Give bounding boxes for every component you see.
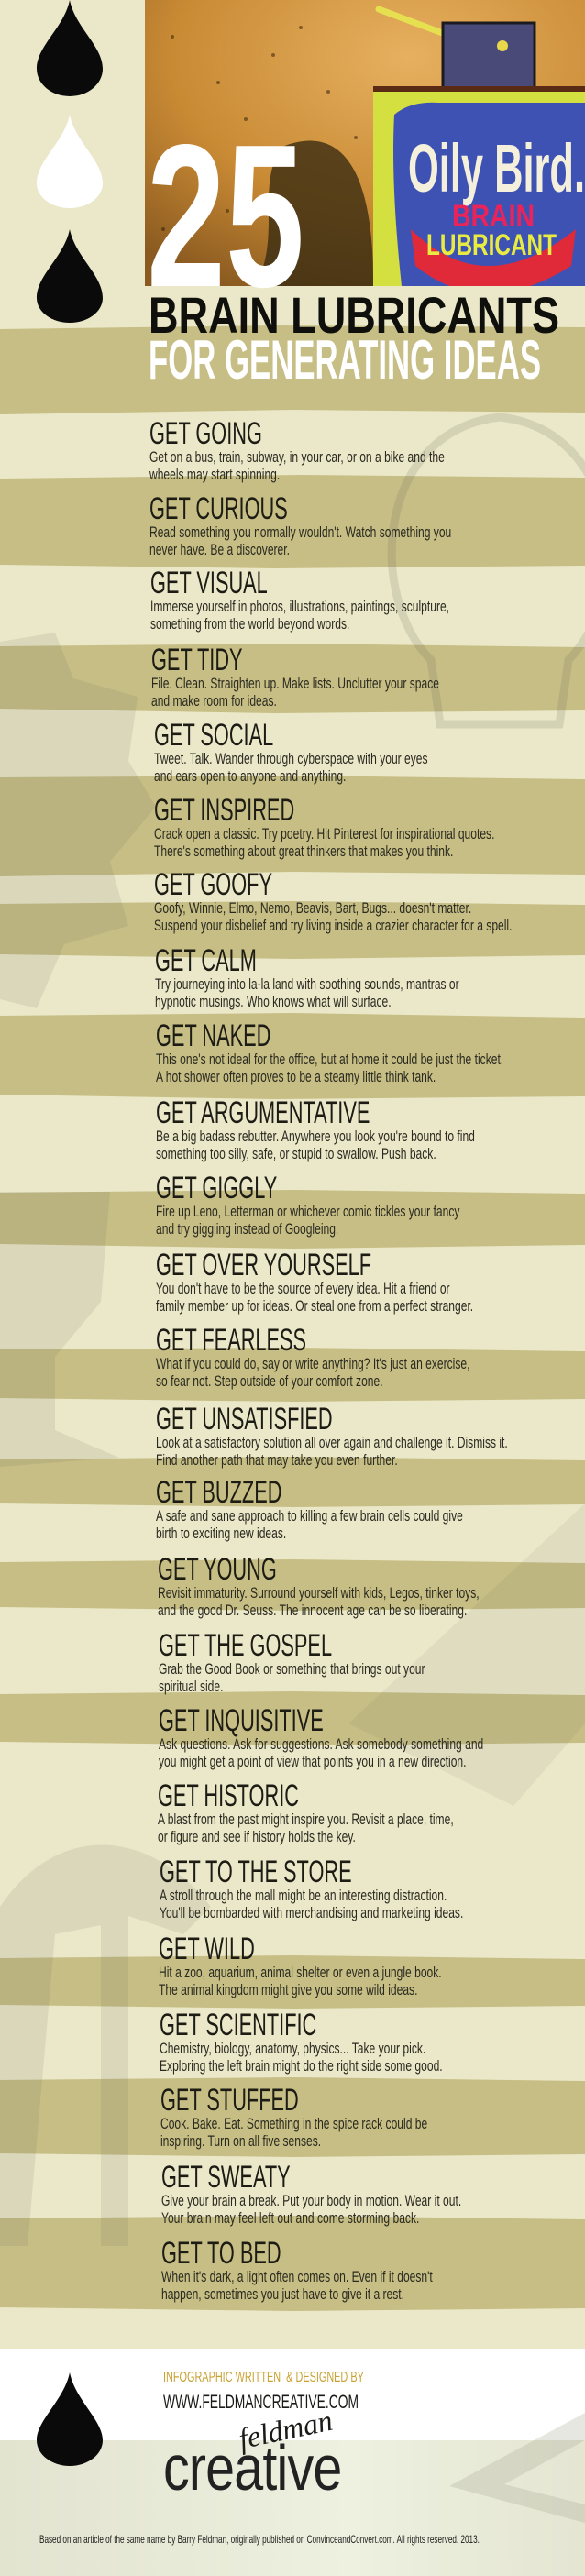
item 6: GET INSPIRED <box>154 793 294 828</box>
item 16: Revisit immaturity. Surround yourself with kids, Legos, tinker toys, <box>158 1584 480 1602</box>
item 6: Crack open a classic. Try poetry. Hit Pinterest for inspirational quotes. <box>154 825 494 842</box>
item 19 <box>158 1778 454 1845</box>
item 6: There's something about great thinkers that makes you think. <box>154 842 453 860</box>
item 10: something too silly, safe, or stupid to swallow. Push back. <box>156 1145 436 1162</box>
item 14 <box>156 1402 508 1469</box>
item 10: GET ARGUMENTATIVE <box>156 1095 370 1130</box>
item 16: GET YOUNG <box>158 1552 277 1587</box>
item 9: This one's not ideal for the office, but at home it could be just the ticket. <box>156 1051 503 1068</box>
item 17: GET THE GOSPEL <box>159 1628 332 1663</box>
title <box>147 128 559 391</box>
item 12: GET OVER YOURSELF <box>156 1248 371 1282</box>
item 10: Be a big badass rebutter. Anywhere you look you're bound to find <box>156 1128 475 1145</box>
item 3: Immerse yourself in photos, illustrations, paintings, sculpture, <box>150 598 449 615</box>
item 10 <box>156 1095 475 1162</box>
item 8 <box>155 943 459 1010</box>
item 25: When it's dark, a light often comes on. Even if it doesn't <box>161 2268 433 2285</box>
item 3: something from the world beyond words. <box>150 615 349 633</box>
item 9: GET NAKED <box>156 1018 270 1053</box>
item 24: Give your brain a break. Put your body in motion. Wear it out. <box>161 2192 461 2209</box>
item 8: hypnotic musings. Who knows what will surface. <box>155 993 392 1010</box>
icon: drops column <box>37 0 103 323</box>
decorative chevron <box>449 2413 585 2523</box>
item 4 <box>151 643 439 710</box>
item 9: A hot shower often proves to be a steamy little think tank. <box>156 1068 436 1085</box>
item 5 <box>154 718 428 785</box>
item 5: and ears open to anyone and anything. <box>154 767 346 785</box>
header photo: oil can: BRAIN <box>452 199 535 234</box>
item 2: never have. Be a discoverer. <box>149 541 290 558</box>
item 21: The animal kingdom might give you some wild ideas. <box>159 1981 417 1998</box>
item 7: Goofy, Winnie, Elmo, Nemo, Beavis, Bart, Bugs... doesn't matter. <box>154 899 471 917</box>
item 15: GET BUZZED <box>156 1475 281 1510</box>
item 12: family member up for ideas. Or steal one from a perfect stranger. <box>156 1297 473 1315</box>
item 7: Suspend your disbelief and try living inside a crazier character for a spell. <box>154 917 512 934</box>
footer panel <box>0 2349 585 2576</box>
footer lower background <box>0 2440 585 2576</box>
icon: footer drop <box>37 2372 103 2466</box>
item 17 <box>159 1628 425 1695</box>
item 4: and make room for ideas. <box>151 692 277 710</box>
item 12: You don't have to be the source of every idea. Hit a friend or <box>156 1280 450 1297</box>
item 11: and try giggling instead of Googleing. <box>156 1220 338 1238</box>
item 20 <box>160 1855 463 1921</box>
item 15: birth to exciting new ideas. <box>156 1525 286 1542</box>
item 3 <box>150 566 449 633</box>
item 4: GET TIDY <box>151 643 243 677</box>
item 8: GET CALM <box>155 943 257 978</box>
item 5: Tweet. Talk. Wander through cyberspace with your eyes <box>154 750 428 767</box>
item 15 <box>156 1475 463 1542</box>
item 24: GET SWEATY <box>161 2160 291 2195</box>
item 23: GET STUFFED <box>160 2083 299 2118</box>
item 20: You'll be bombarded with merchandising and marketing ideas. <box>160 1904 463 1921</box>
item 6 <box>154 793 494 860</box>
item 11: GET GIGGLY <box>156 1171 277 1205</box>
item 2 <box>149 491 451 558</box>
item 2: GET CURIOUS <box>149 491 288 526</box>
item 13 <box>156 1323 469 1390</box>
item 1 <box>149 416 445 483</box>
item 19: or figure and see if history holds the key. <box>158 1828 356 1845</box>
credit text: WWW.FELDMANCREATIVE.COM <box>163 2392 359 2413</box>
item 3: GET VISUAL <box>150 566 268 600</box>
credit text: INFOGRAPHIC WRITTEN & DESIGNED BY <box>163 2370 364 2385</box>
item 21: Hit a zoo, aquarium, animal shelter or even a jungle book. <box>159 1964 442 1981</box>
item 19: A blast from the past might inspire you. Revisit a place, time, <box>158 1811 454 1828</box>
item 15: A safe and sane approach to killing a few brain cells could give <box>156 1507 463 1525</box>
item 16 <box>158 1552 480 1619</box>
item 23: inspiring. Turn on all five senses. <box>160 2132 321 2150</box>
item 17: Grab the Good Book or something that brings out your <box>159 1660 425 1678</box>
item 18: you might get a point of view that points you in a new direction. <box>159 1753 466 1770</box>
header photo: oil can <box>145 0 585 286</box>
nozzle <box>379 9 452 37</box>
item 7: GET GOOFY <box>154 867 272 902</box>
decorative faint shapes <box>392 417 585 1558</box>
item 16: and the good Dr. Seuss. The innocent age can be so liberating. <box>158 1602 467 1619</box>
credit text <box>163 2370 364 2413</box>
item 18 <box>159 1703 483 1770</box>
item 19: GET HISTORIC <box>158 1778 299 1813</box>
item 25: happen, sometimes you just have to give it a rest. <box>161 2285 404 2303</box>
item 21 <box>159 1932 442 1998</box>
item 13: GET FEARLESS <box>156 1323 306 1358</box>
logo: feldman creative: feldman <box>236 2404 336 2455</box>
item 22: GET SCIENTIFIC <box>160 2008 316 2042</box>
item 11 <box>156 1171 460 1238</box>
item 14: Find another path that may take you even further. <box>156 1451 398 1469</box>
logo: feldman creative: creative <box>163 2432 341 2504</box>
item 1: Get on a bus, train, subway, in your car, or on a bike and the <box>149 448 445 466</box>
item 18: GET INQUISITIVE <box>159 1703 324 1738</box>
item 14: Look at a satisfactory solution all over again and challenge it. Dismiss it. <box>156 1434 508 1451</box>
item 22: Exploring the left brain might do the right side some good. <box>160 2057 443 2075</box>
item 14: GET UNSATISFIED <box>156 1402 333 1437</box>
item 13: What if you could do, say or write anything? It's just an exercise, <box>156 1355 469 1372</box>
item 24: Your brain may feel left out and come storming back. <box>161 2209 419 2227</box>
item 17: spiritual side. <box>159 1678 223 1695</box>
item 1: wheels may start spinning. <box>149 466 280 483</box>
item 22: Chemistry, biology, anatomy, physics... Take your pick. <box>160 2040 425 2057</box>
item 1: GET GOING <box>149 416 262 451</box>
item 13: so fear not. Step outside of your comfort zone. <box>156 1372 383 1390</box>
item 4: File. Clean. Straighten up. Make lists. Unclutter your space <box>151 675 439 692</box>
item 20: A stroll through the mall might be an interesting distraction. <box>160 1887 447 1904</box>
item 23 <box>160 2083 427 2150</box>
item 9 <box>156 1018 503 1085</box>
item 7 <box>154 867 512 934</box>
source note: Based on an article of the same name by Barry Feldman, originally published on ConvinceandConvert.com. All rights reserved. 2013. <box>39 2533 480 2546</box>
item 8: Try journeying into la-la land with soothing sounds, mantras or <box>155 975 459 993</box>
item 12 <box>156 1248 473 1315</box>
item 25 <box>161 2236 433 2303</box>
item 2: Read something you normally wouldn't. Watch something you <box>149 523 451 541</box>
item 21: GET WILD <box>159 1932 255 1966</box>
item 20: GET TO THE STORE <box>160 1855 352 1889</box>
item 18: Ask questions. Ask for suggestions. Ask somebody something and <box>159 1735 483 1753</box>
item 23: Cook. Bake. Eat. Something in the spice rack could be <box>160 2115 427 2132</box>
item 11: Fire up Leno, Letterman or whichever comic tickles your fancy <box>156 1203 459 1220</box>
item 5: GET SOCIAL <box>154 718 273 753</box>
item 22 <box>160 2008 443 2075</box>
item 25: GET TO BED <box>161 2236 281 2271</box>
item 24 <box>161 2160 461 2227</box>
